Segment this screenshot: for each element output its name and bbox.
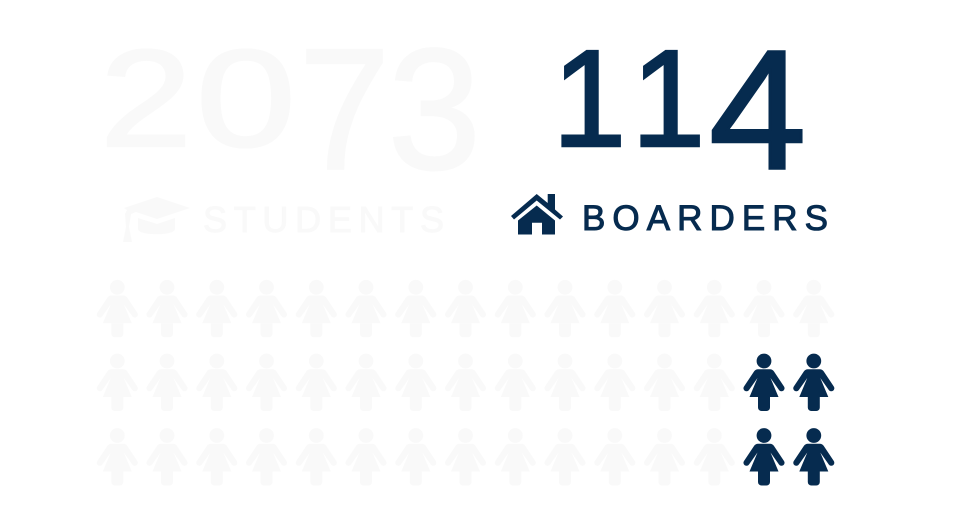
number: 114: 1 — [552, 22, 626, 176]
number: 114: 1 — [632, 22, 705, 176]
icon: graduation cap — [123, 197, 190, 242]
label: students: STUDENTS — [203, 199, 444, 240]
number: 2073: 2 — [100, 22, 192, 176]
label: boarders: BOARDERS — [582, 199, 828, 238]
pictogram: row 1 — [97, 280, 834, 337]
icon: house — [511, 194, 563, 234]
number: 2073: 7 — [299, 13, 390, 205]
number: 2073: 3 — [388, 13, 481, 205]
pictogram: row 2 — [97, 354, 834, 411]
number: 114 — [552, 15, 806, 205]
number: 2073: 0 — [196, 21, 296, 175]
number: 2073 — [100, 13, 481, 205]
number: 114: 4 — [709, 15, 806, 205]
pictogram: row 3 — [97, 428, 834, 486]
